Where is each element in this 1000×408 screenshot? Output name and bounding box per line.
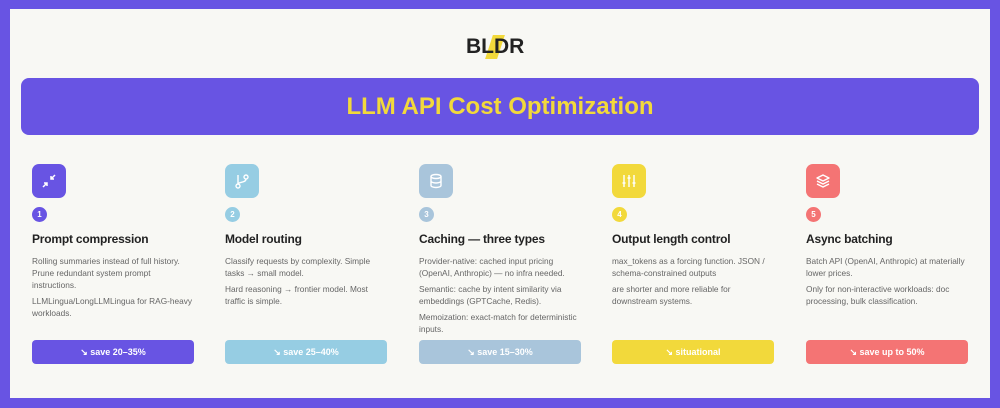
panel: model routing: Model routing [225, 232, 302, 246]
badge [612, 340, 774, 364]
panel: prompt compression: Prompt compression [32, 232, 148, 246]
title banner: LLM API Cost Optimization [346, 92, 654, 120]
icon: layers [806, 164, 840, 198]
panel: output length [612, 164, 774, 364]
badge: ↘ save 25–40% [273, 346, 339, 356]
panel: model routing: Classify requests by complexity. Simple tasks → small model. [225, 256, 370, 278]
panel: caching [419, 164, 581, 364]
panel: output length: Output length control [612, 232, 730, 246]
badge [225, 340, 387, 364]
panel: model routing: 2 [230, 210, 235, 219]
panel: async batching [806, 164, 968, 364]
panel: output length: max_tokens as a forcing function. JSON / schema-constrained outputs [612, 256, 765, 278]
logo: BLDR [466, 35, 524, 58]
badge: ↘ save 15–30% [467, 346, 533, 356]
icon: branch [225, 164, 259, 198]
panel: async batching: Batch API (OpenAI, Anthropic) at materially lower prices. [806, 256, 965, 278]
panel: caching: Caching — three types [419, 232, 545, 246]
panel: caching: Memoization: exact-match for deterministic inputs. [419, 312, 577, 334]
panel: async batching: Only for non-interactive workloads: doc processing, bulk classification. [806, 284, 949, 306]
icon: sliders [612, 164, 646, 198]
panel: async batching: 5 [811, 210, 816, 219]
panel: prompt compression: 1 [37, 210, 42, 219]
panel: model routing: Hard reasoning → frontier model. Most traffic is simple. [225, 284, 368, 306]
badge [419, 340, 581, 364]
panel: caching: Semantic: cache by intent similarity via embeddings (GPTCache, Redis). [419, 284, 562, 306]
panel: caching: Provider-native: cached input pricing (OpenAI, Anthropic) — no infra needed. [419, 256, 565, 278]
panel: prompt compression: LLMLingua/LongLLMLingua for RAG-heavy workloads. [32, 296, 192, 318]
icon: compress [32, 164, 66, 198]
icon: database [419, 164, 453, 198]
badge: ↘ situational [665, 346, 721, 356]
badge [806, 340, 968, 364]
panel: model routing [225, 164, 387, 364]
panel: output length: 4 [617, 210, 622, 219]
panel: caching: 3 [424, 210, 429, 219]
panel: prompt compression: Rolling summaries instead of full history. Prune redundant system prompt instructions. [32, 256, 180, 290]
title banner [21, 78, 979, 135]
badge: ↘ save up to 50% [849, 346, 925, 356]
badge [32, 340, 194, 364]
panel: output length: are shorter and more reliable for downstream systems. [612, 284, 731, 306]
panel: async batching: Async batching [806, 232, 893, 246]
panel: prompt compression [32, 164, 194, 364]
badge: ↘ save 20–35% [80, 346, 146, 356]
